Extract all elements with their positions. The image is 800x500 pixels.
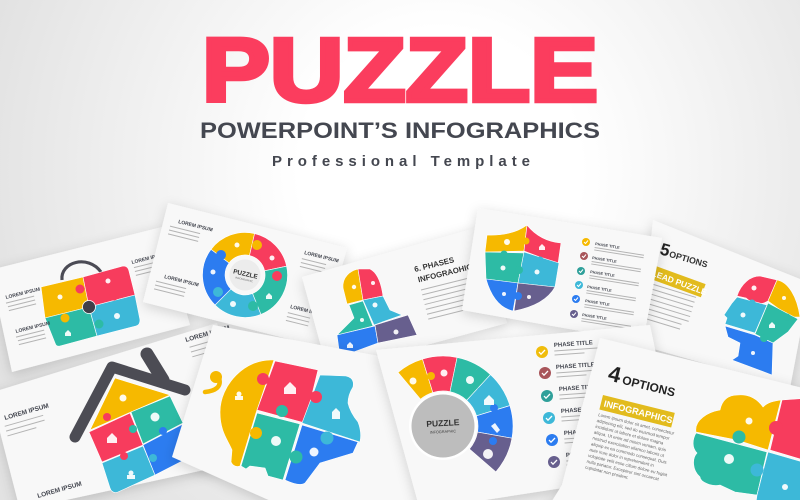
head puzzle (724, 276, 800, 375)
label top left: LOREM IPSUM (178, 219, 213, 233)
ring centre label: INFOGRAPHIC (235, 275, 254, 283)
chimney (147, 354, 163, 380)
label bottom left: LOREM IPSUM (164, 274, 199, 288)
tagline: Professional Template (272, 153, 530, 170)
text block: voluptate velit esse cillum dolore eu fugiat (588, 453, 668, 478)
fan centre label: PUZZLE (426, 417, 460, 429)
heading: 6 phases (413, 250, 478, 285)
label bottom: LOREM IPSUM (37, 481, 83, 500)
label right (185, 325, 235, 357)
bust puzzle (337, 269, 417, 357)
heading: 6 phases: INFOGRAOHICS (417, 261, 478, 284)
phase list: PHASE TITLE (566, 450, 605, 459)
label top left (168, 217, 213, 244)
phase list: PHASE TITLE (564, 428, 603, 437)
panel: shield slide (462, 208, 662, 342)
panel: house slide (0, 323, 250, 500)
phase list: PHASE TITLE (587, 285, 612, 293)
label top right: LOREM IPSUM (304, 250, 339, 264)
label bottom left (154, 272, 199, 299)
right label top (131, 252, 169, 276)
text block: aliquip ex ea commodo consequat. Duis (591, 441, 668, 465)
phase list: PHASE TITLE (592, 256, 617, 264)
heading: 5 options: 5 (658, 240, 672, 260)
text block (642, 284, 696, 331)
label top (2, 403, 54, 436)
briefcase puzzle (41, 266, 140, 346)
pig tail (205, 371, 222, 392)
label bottom right (286, 304, 325, 329)
subtitle: POWERPOINT’S INFOGRAPHICS (200, 118, 600, 143)
left label bottom: LOREM IPSUM (15, 321, 51, 335)
phase list: PHASE TITLE (561, 406, 600, 415)
label top: LOREM IPSUM (4, 403, 50, 422)
phase list: PHASE TITLE (554, 340, 593, 349)
label right: LOREM IPSUM (185, 325, 231, 344)
pig puzzle (220, 360, 361, 484)
title: PUZZLE (202, 21, 598, 121)
heading: 5 options: OPTIONS (668, 249, 709, 270)
left label bottom (14, 321, 53, 345)
panel: piggy bank slide (172, 325, 420, 500)
heading: 4 options: OPTIONS (621, 373, 677, 400)
text block: aute irure dolor in reprehenderit in (589, 447, 655, 468)
phase list: PHASE TITLE (582, 313, 607, 321)
left label top (4, 287, 43, 311)
roof (75, 367, 185, 437)
text block: cupidatat non proident. (585, 465, 629, 480)
phase list: PHASE TITLE (590, 270, 615, 278)
fan centre label: INFOGRAPHIC (430, 429, 456, 435)
heading: 5 options (658, 240, 711, 272)
panel: circular puzzle slide (143, 203, 347, 347)
text block: incididunt ut labore et dolore magna (595, 424, 664, 446)
text block (421, 278, 475, 319)
phase list: PHASE TITLE (559, 384, 598, 393)
phase list (536, 340, 614, 468)
ring centre label (230, 260, 260, 290)
text block: nostrud exercitation ullamco laboris ut (592, 435, 665, 458)
text block (585, 412, 679, 489)
label: infographics: INFOGRAPHICS (603, 399, 674, 425)
panel: 4 options slide (540, 338, 800, 500)
left label top: LOREM IPSUM (5, 287, 41, 301)
label bottom right: LOREM IPSUM (290, 304, 325, 318)
text block: adipiscing elit, sed do eiusmod tempor (596, 418, 671, 441)
text block: aliqua. Ut enim ad minim veniam, quis (593, 430, 667, 453)
heading: 4 options (606, 361, 679, 402)
text block: Lorem ipsum dolor sit amet, consectetur (598, 412, 675, 436)
phase list: PHASE TITLE (595, 242, 620, 250)
fan puzzle (398, 356, 513, 472)
text block: nulla pariatur. Excepteur sint occaecat (586, 459, 660, 482)
cloud puzzle (693, 395, 800, 500)
house puzzle (89, 378, 192, 492)
briefcase handle (62, 262, 101, 280)
heading: 6 phases: 6. PHASES (413, 255, 455, 274)
ring centre label: PUZZLE (232, 268, 259, 281)
right label top: LOREM IPSUM (131, 252, 167, 266)
fan centre label (409, 392, 477, 460)
panel: semicircle phases slide (376, 325, 680, 500)
shield puzzle (485, 225, 561, 311)
heading: 4 options: 4 (606, 361, 624, 388)
label: lead puzzle: LEAD PUZZLE (651, 268, 709, 297)
ring puzzle (203, 232, 288, 317)
panel: 6 phases slide (302, 228, 507, 372)
panel: briefcase slide (0, 227, 190, 372)
phase list: PHASE TITLE (556, 362, 595, 371)
label top right (300, 250, 339, 275)
phase list: PHASE TITLE (585, 299, 610, 307)
phase list (570, 238, 645, 329)
panel: 5 options slide (640, 220, 800, 388)
